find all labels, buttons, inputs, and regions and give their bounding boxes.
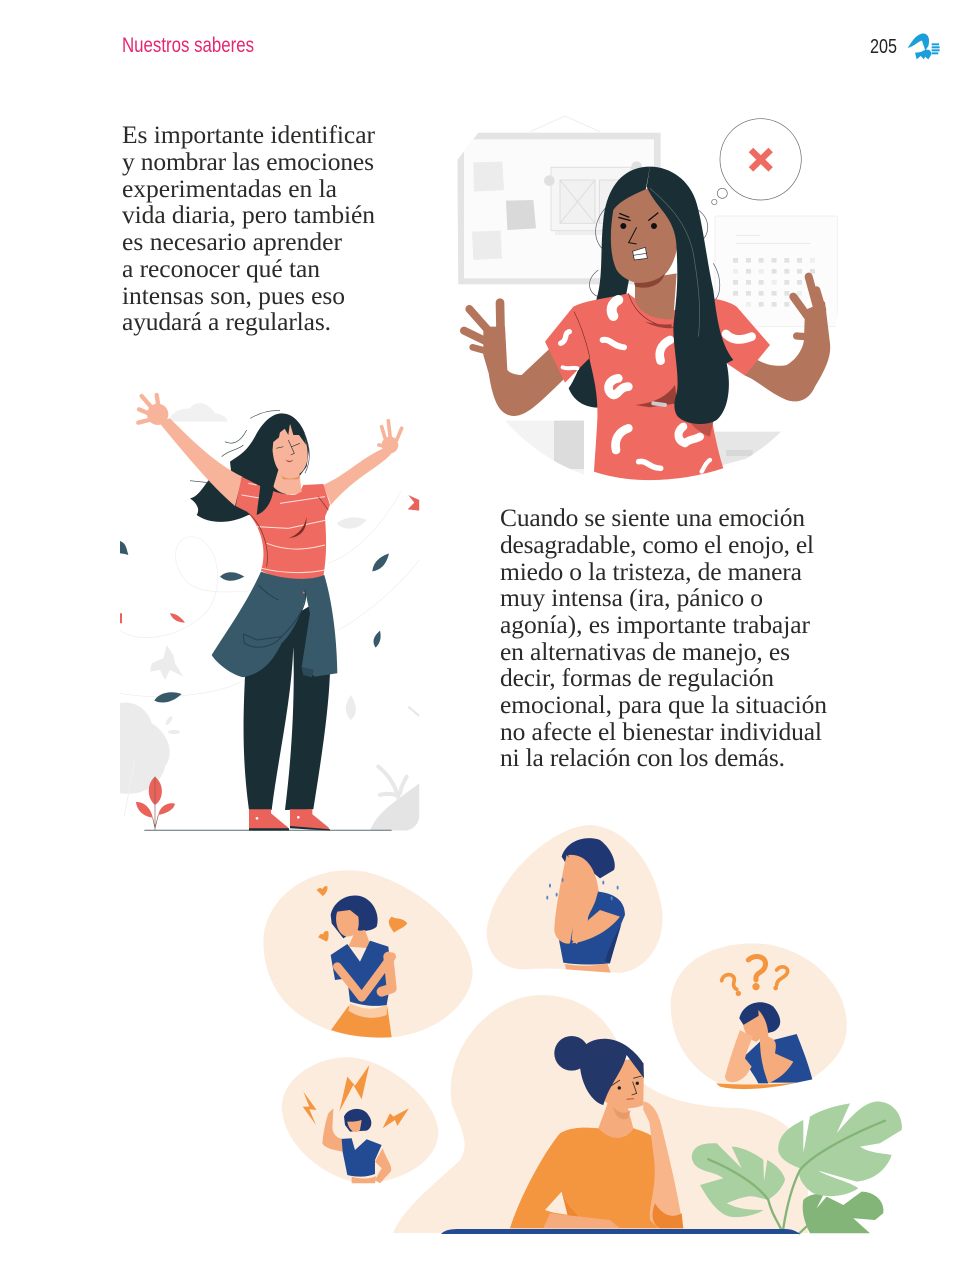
text block: identificar emociones: Es importante identificar [122,120,376,149]
text block: emociones desagradables: Cuando se siente una emoción [500,503,805,532]
icon: blue bird glyph [908,33,940,59]
thought bubble with red X [712,119,801,205]
section header: Nuestros saberes: Nuestros saberes [122,34,254,57]
woman figure [464,167,830,480]
text block: identificar emociones: es necesario aprender [122,227,342,256]
text block: identificar emociones: ayudará a regularlas. [122,307,331,336]
ground line [144,829,392,832]
woman body with bun [510,1036,683,1228]
text block: identificar emociones: experimentadas en la [122,174,337,203]
text block: emociones desagradables: decir, formas de regulación [500,663,774,692]
text block: emociones desagradables: ni la relación con los demás. [500,743,785,772]
illustration: thinking woman with emotions [263,825,902,1234]
page number: 205 [870,36,897,58]
emotion bubble: sadness [487,825,663,973]
text block: identificar emociones [122,120,376,336]
text block: identificar emociones: y nombrar las emociones [122,147,374,176]
text block: emociones desagradables: en alternativas de manejo, es [500,637,790,666]
plant: monstera leaves [692,1102,902,1233]
text block: emociones desagradables: muy intensa (ira, pánico o [500,583,763,612]
nature background [120,403,419,831]
text block: emociones desagradables: agonía), es importante trabajar [500,610,810,639]
illustration: happy woman in the wind [120,395,419,831]
emotion bubble: anger [282,1057,438,1183]
office background [457,116,837,480]
text block: identificar emociones: a reconocer qué tan [122,254,320,283]
text block: identificar emociones: intensas son, pues eso [122,281,345,310]
red plant [136,777,175,830]
text block: identificar emociones: vida diaria, pero también [122,200,375,229]
text block: emociones desagradables: emocional, para que la situación [500,690,827,719]
emotion bubble: love [263,870,473,1038]
falling leaves [120,488,419,703]
desk bar [441,1229,800,1234]
text block: emociones desagradables: no afecte el bienestar individual [500,717,822,746]
text block: emociones desagradables [500,503,827,772]
blob: main background [393,995,808,1233]
emotion bubble: confusion [671,943,847,1089]
illustration: angry woman [457,116,837,480]
woman figure [138,395,402,831]
text block: emociones desagradables: desagradable, como el enojo, el [500,530,814,559]
text block: emociones desagradables: miedo o la tristeza, de manera [500,557,802,586]
